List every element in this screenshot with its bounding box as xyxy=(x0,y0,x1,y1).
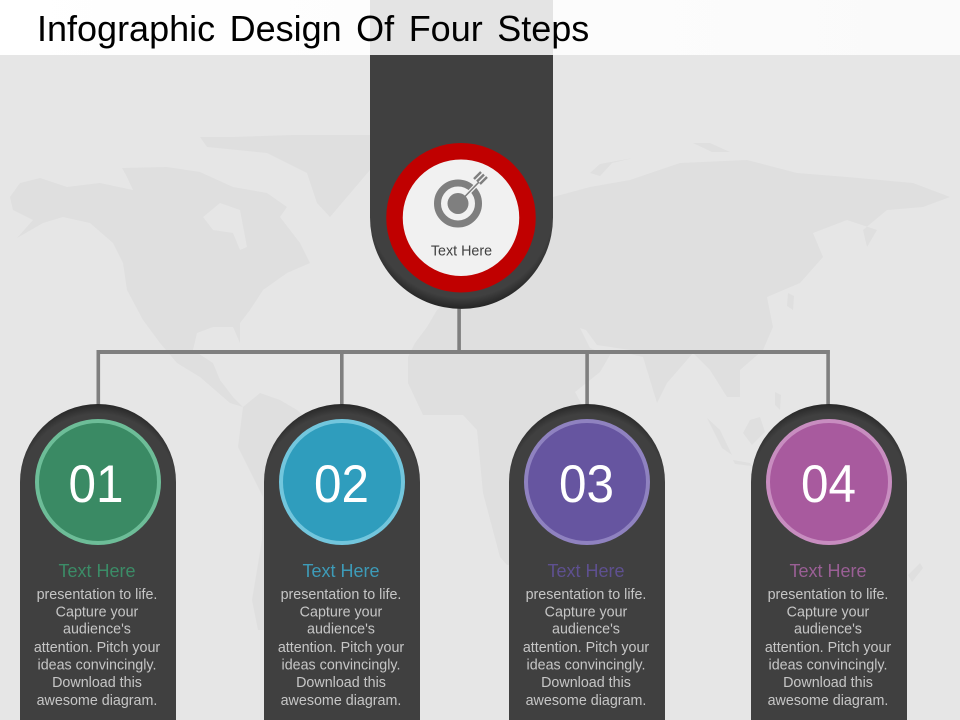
step 04 body: awesome diagram. xyxy=(768,693,888,709)
red ring xyxy=(394,151,528,284)
step 02 body: presentation to life. xyxy=(281,587,401,603)
title band xyxy=(0,0,960,55)
step 04 body: Capture your xyxy=(787,605,870,621)
step 03 circle xyxy=(526,421,648,543)
step 02 body: ideas convincingly. xyxy=(282,658,400,674)
step 04 body: presentation to life. xyxy=(768,587,888,603)
step 04 body xyxy=(765,587,891,709)
step 01 circle xyxy=(37,421,159,543)
step 03 body: audience's xyxy=(552,622,620,638)
step 02 body: awesome diagram. xyxy=(281,693,401,709)
connector lines xyxy=(96,305,830,408)
step 01 body: presentation to life. xyxy=(37,587,157,603)
step 03 number: 03 xyxy=(559,455,614,514)
step 02 body xyxy=(278,587,404,709)
step 04 body: audience's xyxy=(794,622,862,638)
step 04 circle xyxy=(768,421,890,543)
step 03 body: ideas convincingly. xyxy=(527,658,645,674)
step 03 body xyxy=(523,587,649,709)
step 03 body: attention. Pitch your xyxy=(523,640,649,656)
panel: step 04 xyxy=(751,404,907,720)
panel: step 02 xyxy=(264,404,420,720)
step 04 heading: Text Here xyxy=(789,561,867,581)
step 03 heading: Text Here xyxy=(547,561,625,581)
step 03 body: awesome diagram. xyxy=(526,693,646,709)
step 04 body: Download this xyxy=(783,675,873,691)
step 02 body: Capture your xyxy=(300,605,383,621)
step 01 body xyxy=(34,587,160,709)
step 02 body: attention. Pitch your xyxy=(278,640,404,656)
step 04 number: 04 xyxy=(801,455,856,514)
step 01 body: Capture your xyxy=(56,605,139,621)
step 01 heading: Text Here xyxy=(58,561,136,581)
top panel xyxy=(370,55,553,309)
step 03 body: Download this xyxy=(541,675,631,691)
step 01 body: Download this xyxy=(52,675,142,691)
step 02 number: 02 xyxy=(314,455,369,514)
step 03 body: Capture your xyxy=(545,605,628,621)
step 02 heading: Text Here xyxy=(302,561,380,581)
icon: target with arrow xyxy=(438,172,487,224)
step 02 body: Download this xyxy=(296,675,386,691)
title: Infographic Design Of Four Steps xyxy=(37,8,589,49)
step 01 number: 01 xyxy=(68,455,124,514)
step 04 body: ideas convincingly. xyxy=(769,658,887,674)
step 02 circle xyxy=(281,421,403,543)
step 01 body: attention. Pitch your xyxy=(34,640,160,656)
panel: step 01 xyxy=(20,404,176,720)
step 02 body: audience's xyxy=(307,622,375,638)
step 03 body: presentation to life. xyxy=(526,587,646,603)
step 01 body: audience's xyxy=(63,622,131,638)
step 01 body: ideas convincingly. xyxy=(38,658,156,674)
step 04 body: attention. Pitch your xyxy=(765,640,891,656)
center label: Text Here xyxy=(431,244,492,260)
world map xyxy=(10,135,950,630)
panel: step 03 xyxy=(509,404,665,720)
step 01 body: awesome diagram. xyxy=(37,693,157,709)
